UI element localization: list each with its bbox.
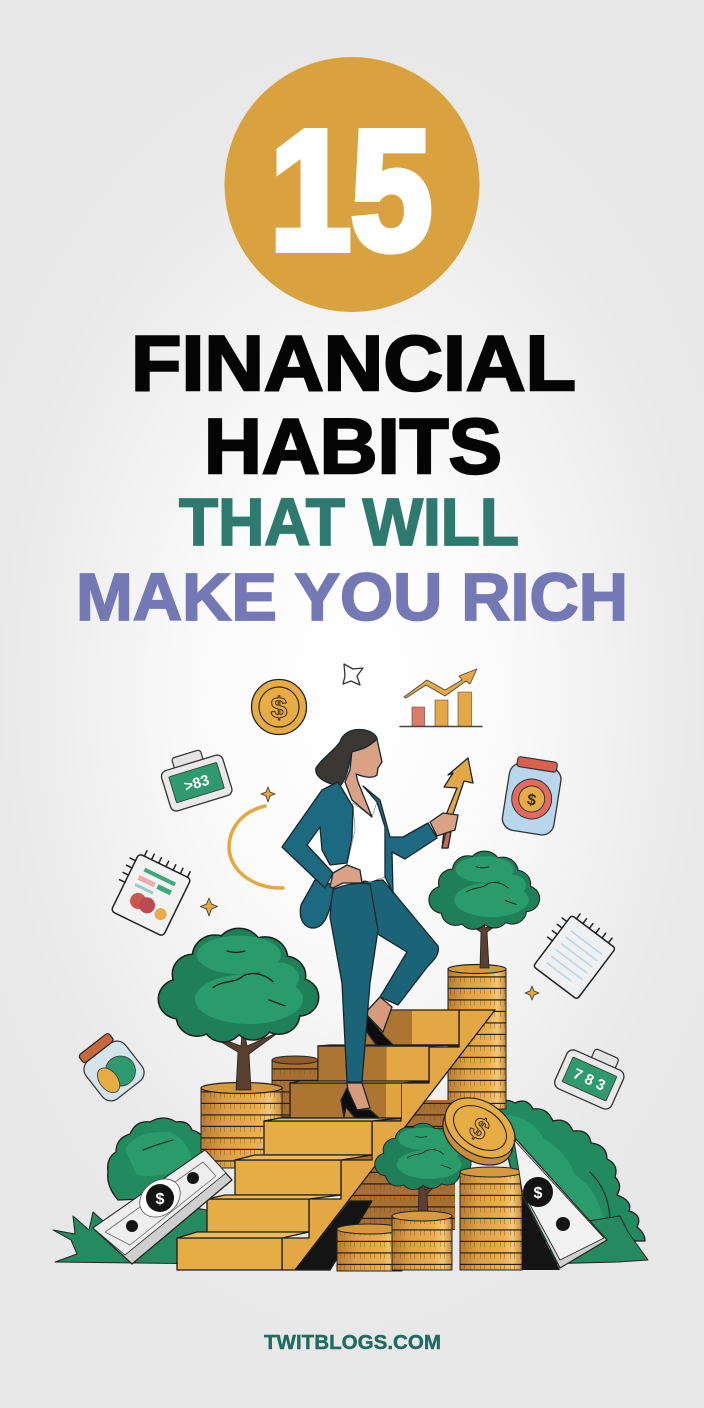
shirt	[347, 802, 385, 882]
staircase	[177, 1010, 495, 1270]
small tree mid	[375, 1124, 471, 1214]
icon: dollar coin	[252, 680, 306, 734]
neck and face	[345, 739, 382, 817]
icon: jar left	[73, 1029, 148, 1105]
bent leg	[360, 880, 438, 1005]
coin stack behind stairs	[448, 964, 506, 1109]
subtitle: Make You Rich: MAKE YOU RICH	[76, 560, 628, 635]
icon: notebook left	[106, 846, 194, 936]
back shoe	[364, 1013, 393, 1046]
standing leg	[330, 883, 378, 1082]
front shoe	[341, 1088, 379, 1118]
front foot	[347, 1083, 370, 1110]
raised hand	[430, 813, 458, 836]
coin stack back left	[272, 1056, 318, 1117]
icon: cash device left	[157, 744, 233, 812]
icon: cash device right: 7 8 3	[570, 1065, 608, 1095]
back foot	[365, 997, 392, 1032]
chart: bars with rising arrow	[400, 669, 482, 726]
illustration	[53, 664, 648, 1271]
coin stack left with tree	[159, 929, 318, 1168]
hair	[316, 729, 377, 785]
subtitle: That Will: THAT WILL	[179, 485, 519, 560]
leaning dollar coin: $	[463, 1111, 495, 1148]
icon: sparkle outline	[343, 664, 363, 685]
hip hand	[330, 865, 362, 888]
jacket right side and arm	[363, 786, 437, 893]
title: Financial Habits	[131, 319, 576, 490]
icon: dollar coin: $	[271, 692, 288, 725]
left bush	[108, 1118, 211, 1200]
icon: sparkles	[200, 787, 539, 1000]
woman figure	[282, 729, 473, 1118]
ground leaves right	[540, 1216, 648, 1264]
icon: cash device right	[552, 1039, 630, 1111]
banknote left: $	[156, 1191, 165, 1208]
coin stacks front	[337, 1167, 522, 1271]
right bush	[495, 1100, 645, 1257]
badge: number 15: 15	[270, 96, 432, 286]
jacket left side and arm	[282, 782, 353, 888]
ground leaves left	[53, 1204, 231, 1264]
banknote left	[93, 1150, 232, 1264]
footer: website: TWITBLOGS.COM	[264, 1332, 441, 1354]
title: Financial Habits: HABITS	[204, 402, 502, 490]
jacket tail	[300, 880, 334, 928]
icon: gold arc	[229, 806, 283, 888]
title: Financial Habits: FINANCIAL	[131, 319, 576, 407]
icon: savings jar right: $	[526, 791, 537, 810]
badge: number 15	[224, 57, 480, 312]
coin stack under stairs	[345, 1100, 455, 1230]
icon: savings jar right	[501, 755, 564, 837]
arrow staff	[442, 758, 473, 848]
banknote right: $	[534, 1185, 543, 1202]
banknote right	[514, 1138, 607, 1270]
tree on right coin stack	[429, 852, 539, 968]
icon: cash device left: >83	[182, 772, 212, 795]
leaning dollar coin	[430, 1085, 528, 1177]
icon: notebook right	[528, 907, 619, 999]
